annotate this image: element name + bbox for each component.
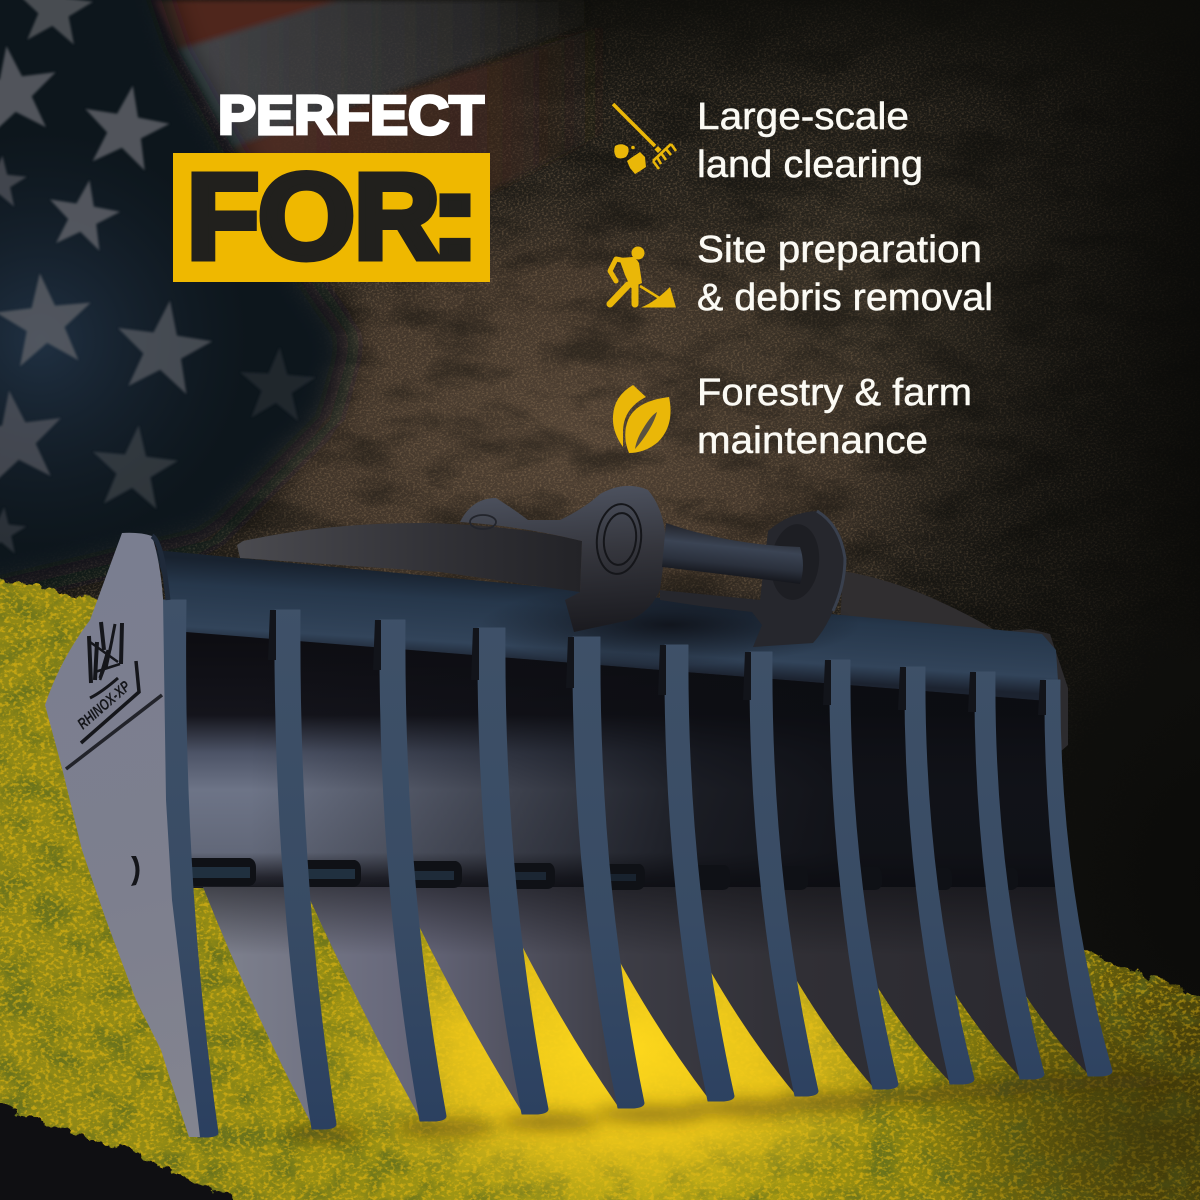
text: site preparation and debris removal bbox=[697, 229, 993, 319]
logo plate edge bbox=[81, 661, 139, 743]
tine front strips bbox=[162, 600, 1112, 1137]
darkening overlay on body bbox=[186, 632, 1060, 892]
left end plate bbox=[45, 533, 200, 1137]
icon: rake and rocks bbox=[613, 104, 676, 174]
lower back of the body bbox=[186, 632, 1060, 892]
text: large-scale land clearing bbox=[697, 96, 923, 186]
text: forestry and farm maintenance bbox=[697, 372, 972, 462]
cross pin bbox=[662, 523, 803, 584]
tine inner shadow slivers bbox=[268, 610, 1046, 715]
cross bar sections bbox=[188, 858, 1018, 890]
text: large-scale land clearing: Large-scale bbox=[697, 96, 909, 138]
icon: leaves bbox=[613, 385, 671, 453]
heading: FOR on yellow block: F bbox=[187, 148, 259, 284]
logo emblem bbox=[89, 622, 122, 698]
soft shadow under the lugs bbox=[480, 585, 860, 665]
text: forestry and farm maintenance: maintenance bbox=[697, 420, 928, 462]
plate seam shadow bbox=[66, 695, 162, 769]
front top plate bbox=[237, 523, 582, 592]
right end plate bbox=[1006, 629, 1068, 752]
rear top plate bbox=[840, 571, 996, 640]
RHINOX-XP logo bbox=[74, 622, 139, 743]
tine side faces bbox=[190, 887, 1088, 1125]
heading: FOR on yellow block: R bbox=[354, 148, 440, 284]
end plate dark edge bbox=[152, 536, 168, 600]
heading: FOR on yellow block: : bbox=[429, 148, 481, 284]
lug pin boss rings bbox=[593, 502, 645, 576]
text: large-scale land clearing: land clearing bbox=[697, 144, 923, 186]
ground shadows under tine tips bbox=[285, 1075, 1180, 1141]
product: rake attachment bbox=[45, 486, 1180, 1141]
heading: PERFECT: PERFECT bbox=[218, 84, 484, 146]
background: American flag stripes and stars bbox=[0, 0, 620, 600]
text: site preparation and debris removal: Site preparation bbox=[697, 229, 982, 271]
shadow at top of side faces bbox=[190, 887, 1088, 1125]
lug small hole bbox=[470, 515, 496, 529]
text: site preparation and debris removal: & debris removal bbox=[697, 277, 993, 319]
heading: FOR on yellow block bbox=[173, 148, 490, 284]
text: forestry and farm maintenance: Forestry & farm bbox=[697, 372, 972, 414]
front lug bbox=[460, 486, 666, 632]
upper rail bbox=[155, 550, 1060, 712]
heading: FOR on yellow block: O bbox=[258, 148, 355, 284]
icon: worker with shovel bbox=[610, 246, 676, 308]
background: yellow distressed brush stroke bbox=[0, 540, 1200, 1200]
logo wordmark: RHINOX-XP bbox=[74, 678, 134, 733]
plate hole bbox=[131, 856, 140, 886]
rear lug and disc bbox=[660, 511, 845, 647]
